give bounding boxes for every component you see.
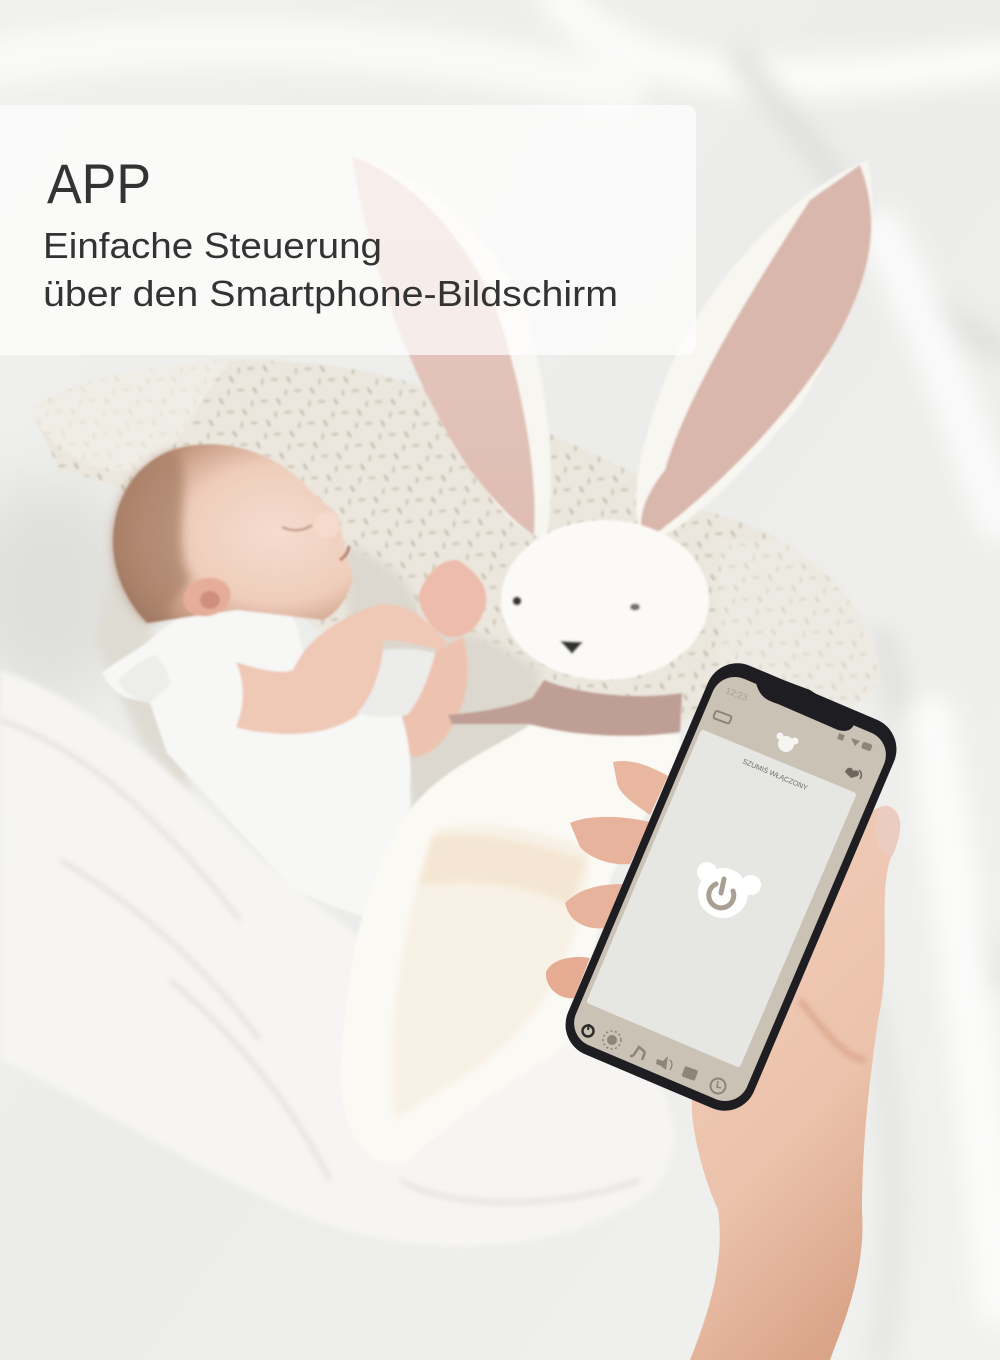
text block: description: über den Smartphone-Bildschirm — [43, 273, 618, 314]
hand — [546, 761, 900, 1360]
phone — [556, 653, 906, 1121]
lace sleeve — [357, 649, 435, 717]
right ear — [636, 160, 872, 545]
arm and hand — [236, 560, 486, 734]
bear logo small — [776, 732, 798, 752]
baby — [102, 444, 486, 917]
status icons — [713, 711, 873, 779]
text block: description — [43, 225, 618, 314]
notch — [756, 672, 856, 731]
panel label: SZUMIŚ WŁĄCZONY — [741, 757, 809, 792]
plush bunny — [340, 156, 872, 1163]
scarf — [448, 680, 682, 736]
frosted text panel — [0, 105, 696, 355]
bottom nav icons — [582, 1024, 726, 1094]
left ear, far — [352, 156, 551, 540]
far forearm — [397, 637, 468, 757]
phone screen — [567, 669, 893, 1109]
head — [113, 444, 353, 623]
onesie — [102, 604, 410, 917]
body blanket — [340, 725, 680, 1163]
heading: APP: APP — [47, 152, 151, 215]
screen panel — [590, 733, 853, 1064]
text block: description: Einfache Steuerung — [43, 225, 382, 266]
head — [501, 520, 709, 680]
clock text: 12:23 — [724, 685, 749, 703]
phone body — [556, 653, 906, 1121]
shaded sheet around baby — [95, 545, 540, 820]
muslin blanket — [0, 670, 674, 1246]
floral pillow — [30, 360, 880, 728]
power button bear icon — [697, 862, 761, 918]
